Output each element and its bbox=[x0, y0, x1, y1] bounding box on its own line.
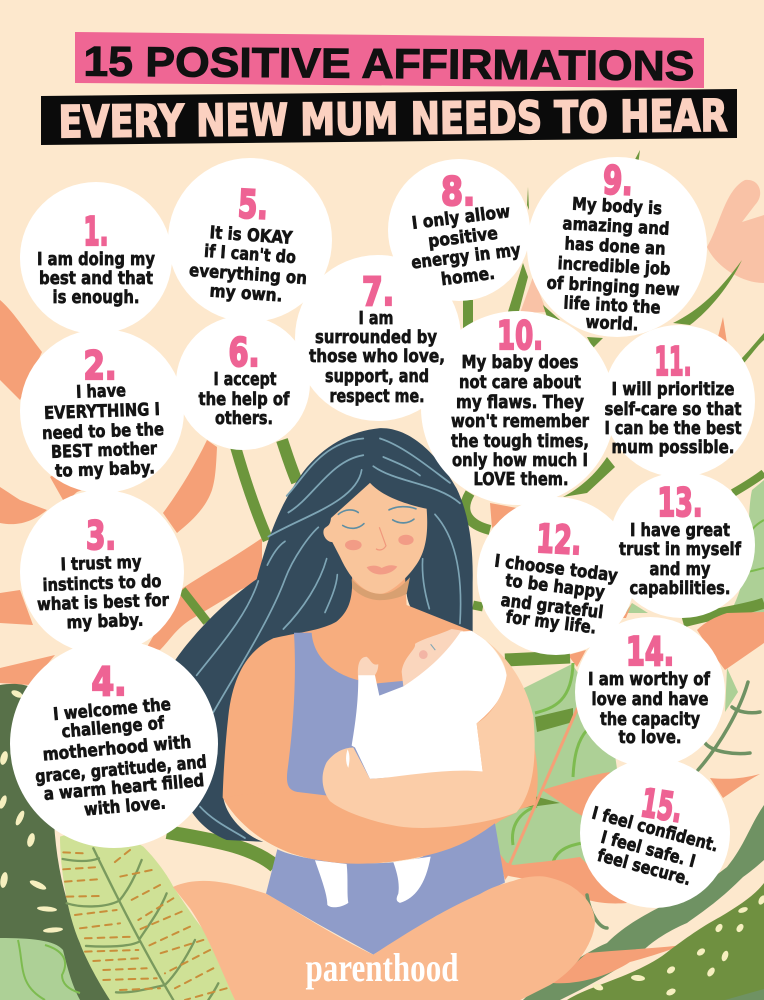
affirmation 8: 8. bbox=[441, 170, 475, 215]
white circles bbox=[10, 157, 755, 908]
affirmation 2: need to be the bbox=[42, 420, 164, 444]
bottom right plant bbox=[523, 805, 764, 1000]
affirmation 11: mum possible. bbox=[612, 438, 734, 458]
affirmation 8: positive bbox=[427, 224, 499, 252]
affirmation 10: not care about bbox=[459, 373, 581, 393]
affirmation 13: capabilities. bbox=[630, 579, 730, 599]
affirmation 13 bbox=[619, 481, 741, 599]
affirmation 12: I choose today bbox=[493, 552, 619, 587]
affirmation 10: the tough times, bbox=[451, 432, 589, 452]
affirmation 15: feel secure. bbox=[595, 846, 693, 890]
mother and baby illustration bbox=[173, 428, 595, 1000]
affirmation 4: with love. bbox=[83, 793, 167, 821]
affirmation 12: and grateful bbox=[500, 591, 604, 623]
affirmation 11: self-care so that bbox=[604, 400, 742, 420]
affirmation 10: won't remember bbox=[451, 412, 589, 432]
affirmation 5: It is OKAY bbox=[209, 223, 293, 249]
affirmation 5: if I can't do bbox=[203, 242, 297, 268]
baby body bbox=[352, 631, 507, 779]
affirmation 2: I have bbox=[76, 381, 126, 403]
affirmation 7 bbox=[309, 270, 445, 407]
affirmation 9: world. bbox=[585, 313, 639, 335]
facial features bbox=[338, 507, 416, 528]
affirmation 12: 12. bbox=[535, 517, 583, 564]
tank top bbox=[266, 633, 505, 955]
affirmation 12 bbox=[493, 517, 619, 638]
affirmation 7: those who love, bbox=[309, 347, 445, 367]
affirmation 12: to be happy bbox=[504, 571, 606, 603]
hair strands bbox=[197, 438, 461, 838]
affirmation 9: My body is bbox=[572, 195, 662, 219]
affirmation 1 bbox=[37, 210, 155, 308]
affirmation 14: the capacity bbox=[600, 710, 700, 730]
logo: parenthood: parenthood bbox=[306, 945, 458, 990]
affirmation 14: love and have bbox=[592, 690, 709, 710]
affirmation 8: I only allow bbox=[411, 202, 511, 234]
affirmation 15: I feel confident. bbox=[590, 804, 720, 856]
affirmation 2: BEST mother bbox=[51, 439, 158, 463]
affirmation 11: 11. bbox=[654, 340, 692, 385]
affirmation 5: 5. bbox=[237, 182, 269, 229]
affirmation 11 bbox=[604, 340, 742, 458]
affirmation 2 bbox=[42, 344, 164, 482]
affirmation 13: trust in myself bbox=[619, 540, 741, 560]
affirmation 9: life into the bbox=[563, 293, 661, 319]
affirmation 9: 9. bbox=[602, 158, 634, 205]
affirmation 7: support, and bbox=[325, 367, 429, 387]
affirmation 3: 3. bbox=[86, 514, 116, 559]
affirmation 9: of bringing new bbox=[546, 274, 680, 300]
background plants bbox=[0, 150, 764, 928]
affirmation 4: a warm heart filled bbox=[43, 771, 205, 805]
affirmation 14: 14. bbox=[626, 630, 674, 675]
affirmation 5: my own. bbox=[209, 281, 283, 307]
affirmation 7: 7. bbox=[362, 270, 394, 315]
affirmation 9: incredible job bbox=[557, 254, 671, 280]
bottom left plant bbox=[0, 684, 110, 1000]
affirmation 3: my baby. bbox=[66, 611, 144, 633]
arm lower bbox=[223, 790, 517, 864]
affirmation 1: I am doing my bbox=[37, 250, 155, 270]
affirmation 3: what is best for bbox=[37, 591, 170, 615]
affirmation 5: everything on bbox=[188, 261, 308, 289]
affirmation 4 bbox=[34, 660, 208, 821]
green patterned leaf bbox=[60, 832, 235, 1000]
affirmation 10: My baby does bbox=[462, 353, 578, 373]
affirmation 14: to love. bbox=[618, 728, 682, 748]
affirmation 6: the help of bbox=[198, 390, 290, 410]
affirmation 2: 2. bbox=[84, 344, 116, 389]
affirmation 10: 10. bbox=[497, 314, 543, 359]
affirmation 6: others. bbox=[215, 409, 273, 429]
affirmation 9: has done an bbox=[564, 234, 666, 260]
affirmation 11: I will prioritize bbox=[612, 380, 735, 400]
affirmation 6: 6. bbox=[228, 331, 260, 376]
affirmation 1: 1. bbox=[84, 210, 108, 255]
affirmation 4: 4. bbox=[92, 660, 126, 705]
affirmation 2: EVERYTHING I bbox=[44, 400, 160, 424]
affirmation 1: is enough. bbox=[52, 288, 140, 308]
affirmation 10: LOVE them. bbox=[474, 470, 568, 490]
affirmation 4: grace, gratitude, and bbox=[34, 753, 208, 787]
affirmation 12: for my life. bbox=[505, 608, 597, 638]
affirmation 4: I welcome the bbox=[52, 695, 172, 725]
title banner: pink: 15 POSITIVE AFFIRMATIONS bbox=[83, 38, 695, 89]
affirmation 3: I trust my bbox=[60, 553, 142, 575]
affirmation 2: to my baby. bbox=[55, 458, 155, 482]
affirmation 14 bbox=[588, 630, 710, 748]
affirmation 10: my flaws. They bbox=[456, 393, 585, 413]
affirmation 10: only how much I bbox=[452, 451, 588, 471]
affirmation 7: I am bbox=[358, 309, 394, 329]
affirmation 1: best and that bbox=[39, 269, 153, 289]
affirmation 13: and my bbox=[650, 560, 711, 580]
hair bbox=[175, 428, 473, 842]
affirmation 4: motherhood with bbox=[42, 733, 192, 765]
affirmation 9 bbox=[546, 158, 680, 335]
affirmation 15: 15. bbox=[638, 781, 686, 832]
face bbox=[323, 483, 427, 594]
affirmation 9: amazing and bbox=[562, 214, 670, 240]
legs bbox=[173, 876, 595, 1000]
affirmation 5 bbox=[188, 182, 308, 307]
affirmation 13: 13. bbox=[658, 481, 702, 526]
affirmation 7: respect me. bbox=[330, 387, 424, 407]
affirmation 8: energy in my bbox=[410, 240, 522, 274]
affirmation 13: I have great bbox=[630, 521, 730, 541]
affirmation 10 bbox=[451, 314, 589, 490]
affirmation 6 bbox=[198, 331, 290, 429]
affirmation 8 bbox=[410, 170, 522, 290]
affirmation 15: I feel safe. I bbox=[599, 828, 697, 872]
affirmation 3: instincts to do bbox=[42, 572, 162, 596]
baby feet bbox=[315, 857, 431, 907]
mother arm with hand bbox=[323, 631, 535, 828]
baby head bbox=[402, 629, 463, 686]
affirmation 4: challenge of bbox=[61, 714, 165, 742]
affirmation 15 bbox=[590, 781, 720, 890]
affirmation 3 bbox=[37, 514, 170, 633]
baby hand bbox=[358, 657, 378, 679]
affirmation 14: I am worthy of bbox=[588, 670, 710, 690]
affirmation 8: home. bbox=[440, 264, 496, 290]
affirmation 7: surrounded by bbox=[315, 328, 437, 348]
affirmation 6: I accept bbox=[214, 370, 276, 390]
body bbox=[223, 568, 538, 864]
